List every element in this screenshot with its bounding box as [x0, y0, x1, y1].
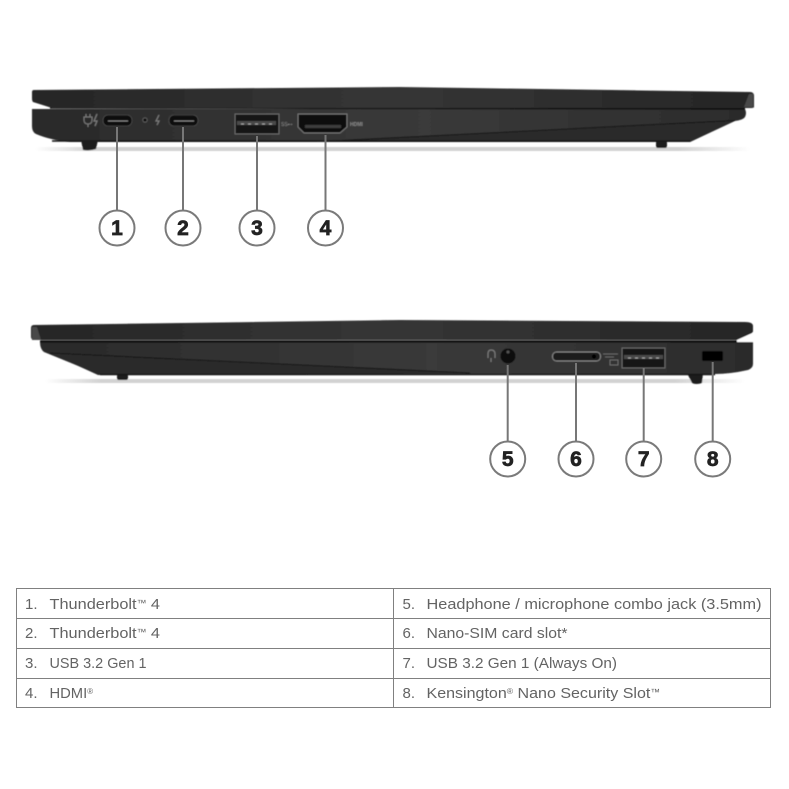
audio jack port 5 — [500, 348, 516, 364]
legend text: 5. — [402, 596, 415, 613]
legend text: ™ — [650, 687, 660, 697]
legend text: ® — [507, 687, 513, 696]
callout 6 — [558, 442, 594, 476]
desk shadow — [35, 147, 750, 151]
laptop base — [32, 109, 746, 142]
desk shadow — [45, 379, 745, 383]
headphone icon — [488, 350, 495, 362]
callout 2 — [166, 210, 200, 246]
legend text: 6. — [402, 625, 415, 642]
callout 4: 4 — [320, 217, 332, 240]
legend text — [25, 596, 762, 702]
callouts bottom — [508, 362, 713, 441]
rubber foot right — [656, 141, 667, 148]
legend text: 2. — [25, 625, 38, 642]
laptop: right side view — [31, 320, 753, 384]
legend table — [16, 588, 770, 708]
callout 1: 1 — [111, 217, 123, 240]
power and thunderbolt icons — [84, 114, 97, 127]
legend text: 4. — [25, 685, 38, 702]
USB-A port 3 — [235, 114, 279, 134]
callout 3: 3 — [251, 217, 263, 240]
legend text: 4 — [146, 596, 160, 613]
HDMI port 4 — [298, 114, 347, 133]
legend text: 3. — [25, 655, 38, 672]
status light — [143, 118, 147, 122]
laptop: left side view — [32, 87, 754, 151]
USB and battery logos — [603, 354, 618, 365]
rubber foot left — [117, 374, 128, 380]
white notch at lid end — [737, 333, 753, 342]
USB-C port 1 — [103, 115, 132, 126]
Kensington slot port 8 — [702, 351, 723, 361]
legend text: ® — [87, 687, 93, 696]
callout 7: 7 — [638, 448, 650, 471]
callout 5: 5 — [502, 448, 514, 471]
legend text: 8. — [402, 685, 415, 702]
callout 7 — [626, 442, 661, 476]
callout 8 — [695, 442, 730, 476]
legend text: Kensington — [426, 685, 502, 702]
legend text: Headphone / microphone combo jack (3.5mm) — [426, 596, 762, 613]
hinge gap — [40, 340, 738, 343]
legend text: ™ — [137, 598, 146, 608]
USB logo: SS⊷ — [281, 122, 293, 128]
legend text: Thunderbolt — [50, 596, 130, 613]
callout 4 — [308, 210, 343, 246]
legend text: Nano-SIM card slot* — [426, 625, 568, 642]
legend text: Thunderbolt — [50, 625, 130, 642]
laptop lid — [31, 320, 753, 340]
callout 5 — [490, 442, 525, 476]
laptop lid — [32, 87, 754, 108]
SIM tray port 6 — [552, 352, 600, 361]
laptop base — [40, 342, 753, 374]
legend text: USB 3.2 Gen 1 — [50, 655, 146, 672]
callout 3 — [240, 210, 274, 246]
legend text: USB 3.2 Gen 1 (Always On) — [426, 655, 617, 672]
callout 8: 8 — [707, 448, 719, 471]
callout 6: 6 — [570, 448, 582, 471]
callout 1 — [100, 210, 134, 246]
callout 2: 2 — [177, 217, 189, 240]
thunderbolt icon — [156, 115, 159, 125]
legend text: Nano Security Slot — [513, 685, 651, 702]
USB-C port 2 — [169, 115, 198, 126]
rubber foot right — [687, 373, 703, 384]
legend text: HDMI — [50, 685, 88, 702]
USB-A port 7 — [622, 348, 665, 368]
legend text: 7. — [402, 655, 415, 672]
legend text: ™ — [137, 627, 146, 637]
hinge gap — [50, 108, 745, 109]
rubber foot left — [81, 140, 98, 150]
legend text: 1. — [25, 596, 38, 613]
HDMI logo: HDMI — [350, 122, 363, 128]
legend text: 4 — [146, 625, 160, 642]
callouts top — [117, 127, 326, 210]
